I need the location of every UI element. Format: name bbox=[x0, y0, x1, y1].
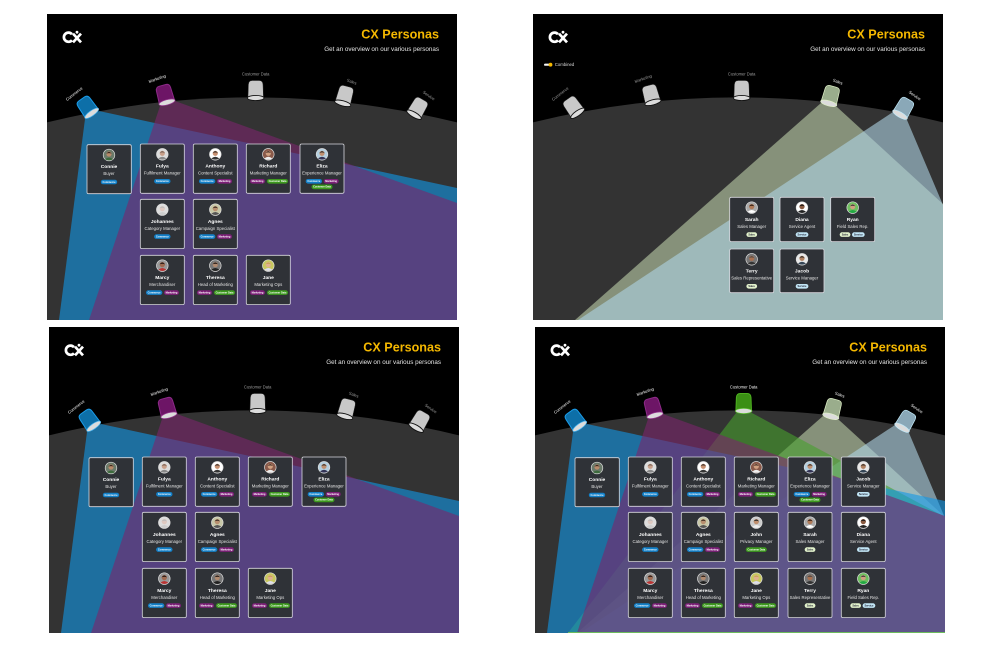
card: Jane bbox=[248, 568, 292, 618]
card: Theresa: Customer Data bbox=[704, 604, 722, 607]
card: Johannes: Johannes bbox=[151, 219, 174, 225]
label: Commerce: Commerce bbox=[551, 85, 570, 102]
spotlight: Sales bbox=[820, 84, 841, 108]
card: Johannes bbox=[140, 199, 184, 249]
logo bbox=[552, 344, 569, 355]
spotlight: Commerce bbox=[77, 407, 102, 433]
card: Agnes: Campaign Specialist bbox=[198, 539, 238, 544]
card: Agnes: Commerce bbox=[689, 548, 702, 551]
card: Richard: Customer Data bbox=[271, 493, 289, 496]
card: Johannes: Johannes bbox=[639, 532, 662, 538]
card: Agnes: Agnes bbox=[696, 532, 711, 538]
card: Johannes: Category Manager bbox=[147, 539, 183, 544]
card: Richard: Marketing Manager bbox=[252, 484, 289, 488]
card: Richard bbox=[246, 144, 290, 193]
card: Jane: Jane bbox=[263, 275, 274, 281]
card: Terry: Sales Representative bbox=[790, 595, 831, 600]
card: Anthony: Content Specialist bbox=[198, 170, 233, 176]
card: Marcy: Marketing bbox=[654, 604, 666, 607]
card: Agnes: Marketing bbox=[219, 235, 231, 238]
title: CX Personas bbox=[363, 341, 441, 355]
card: Sarah: Sales Manager bbox=[737, 224, 767, 229]
beam: Marketing bbox=[91, 414, 459, 633]
beam: Marketing bbox=[89, 101, 457, 320]
card: Richard bbox=[734, 457, 778, 506]
stage dome bbox=[535, 410, 945, 633]
card: Anthony: Content Specialist bbox=[200, 484, 235, 488]
card: Eliza: Experience Manager bbox=[790, 484, 830, 488]
card: Jane bbox=[246, 255, 290, 305]
card: Anthony bbox=[681, 457, 725, 506]
spotlight: Marketing bbox=[154, 83, 176, 107]
spotlight: Marketing bbox=[640, 83, 662, 107]
label: Commerce: Commerce bbox=[67, 398, 86, 415]
card: Jane: Customer Data bbox=[271, 604, 289, 607]
card: Anthony: Marketing bbox=[219, 180, 231, 183]
card: Theresa bbox=[681, 568, 725, 618]
card: Jane: Marketing Ops bbox=[254, 282, 282, 287]
toggle: Combined bbox=[544, 62, 575, 67]
panel: bottom-right, all spotlights bbox=[535, 327, 945, 633]
card: Jacob: Service bbox=[859, 493, 868, 496]
bottom edge line bbox=[568, 632, 945, 633]
card: Marcy: Commerce bbox=[636, 604, 649, 607]
card: Johannes bbox=[628, 512, 672, 562]
beam: Sales bbox=[575, 103, 943, 320]
spotlight: Customer Data bbox=[735, 394, 752, 414]
card: Fulya: Commerce bbox=[156, 180, 169, 183]
card: Sarah: Sales bbox=[748, 233, 756, 236]
card: Ryan bbox=[841, 568, 885, 618]
card: Anthony bbox=[195, 457, 239, 506]
card: Jane: Marketing Ops bbox=[256, 595, 284, 600]
label: Customer Data: Customer Data bbox=[242, 72, 270, 76]
card: Eliza: Eliza bbox=[316, 164, 328, 170]
card: Jane: Jane bbox=[751, 588, 762, 594]
card: Marcy: Commerce bbox=[148, 291, 161, 294]
beam: Customer Data bbox=[568, 413, 945, 633]
card: Ryan bbox=[831, 197, 875, 242]
beam: Service bbox=[578, 112, 943, 320]
beam: Sales bbox=[577, 416, 945, 633]
stage dome bbox=[49, 410, 459, 633]
card: Diana bbox=[841, 512, 885, 562]
card: Jane: Customer Data bbox=[269, 291, 287, 294]
card: Theresa bbox=[195, 568, 239, 618]
label: Service: Service bbox=[908, 90, 922, 102]
card: Connie: Connie bbox=[589, 477, 606, 483]
card: Anthony: Marketing bbox=[707, 493, 719, 496]
card: John bbox=[734, 512, 778, 562]
label: Customer Data: Customer Data bbox=[728, 72, 756, 76]
panel: top-left, Commerce and Marketing spotlights bbox=[47, 14, 457, 320]
card: Connie bbox=[87, 145, 131, 194]
label: Sales: Sales bbox=[832, 77, 844, 86]
card: Fulya: Fulfilment Manager bbox=[144, 170, 181, 176]
card: Ryan: Field Sales Rep. bbox=[837, 224, 868, 229]
card: Jacob: Service Manager bbox=[786, 276, 819, 280]
card: Marcy: Marcy bbox=[157, 588, 172, 594]
card: Agnes: Agnes bbox=[208, 219, 223, 225]
card: Agnes bbox=[193, 199, 237, 249]
logo bbox=[64, 31, 81, 42]
card: Agnes: Commerce bbox=[201, 235, 214, 238]
card: Terry: Terry bbox=[804, 588, 816, 594]
label: Service: Service bbox=[424, 403, 438, 415]
card: Jane: Marketing bbox=[740, 604, 752, 607]
card: Connie: Connie bbox=[103, 477, 120, 483]
card: Diana: Service bbox=[859, 548, 868, 551]
card: Anthony bbox=[193, 144, 237, 193]
card: Agnes: Commerce bbox=[203, 548, 216, 551]
card: Marcy: Merchandiser bbox=[151, 595, 178, 600]
card: Marcy: Commerce bbox=[150, 604, 163, 607]
card: Eliza: Eliza bbox=[804, 477, 816, 483]
card: Eliza: Experience Manager bbox=[302, 170, 342, 176]
card: Anthony: Anthony bbox=[693, 477, 713, 483]
spotlight: Sales bbox=[334, 84, 355, 108]
card: Theresa: Customer Data bbox=[218, 604, 236, 607]
card: Jane: Marketing bbox=[254, 604, 266, 607]
label: Customer Data: Customer Data bbox=[730, 384, 758, 390]
card: Marcy bbox=[140, 255, 184, 305]
title: CX Personas bbox=[361, 28, 439, 42]
card: Connie: Buyer bbox=[591, 484, 603, 489]
label: Service: Service bbox=[422, 90, 436, 102]
card: Theresa: Marketing bbox=[199, 291, 211, 294]
card: Fulya: Commerce bbox=[158, 493, 171, 496]
toggle: Combined: Combined bbox=[555, 62, 575, 67]
card: John: John bbox=[750, 532, 762, 538]
card: Johannes: Category Manager bbox=[633, 539, 669, 544]
card: Ryan: Ryan bbox=[847, 217, 859, 223]
card: Terry bbox=[788, 568, 832, 618]
label: Marketing: Marketing bbox=[148, 73, 167, 84]
logo bbox=[550, 31, 567, 42]
beam: Marketing bbox=[577, 414, 945, 633]
card: Sarah bbox=[730, 197, 774, 242]
card: Connie: Commerce bbox=[105, 494, 118, 497]
card: Diana: Diana bbox=[795, 217, 809, 223]
card: Agnes: Agnes bbox=[210, 532, 225, 538]
beam: Service bbox=[580, 425, 945, 633]
card: Eliza: Commerce bbox=[795, 493, 809, 496]
spotlight: Sales bbox=[336, 397, 357, 421]
card: Fulya: Fulfilment Manager bbox=[632, 484, 669, 488]
label: Commerce: Commerce bbox=[65, 85, 84, 102]
card: Connie: Commerce bbox=[591, 494, 604, 497]
subtitle: Get an overview on our various personas bbox=[326, 359, 441, 366]
card: Jacob: Jacob bbox=[795, 269, 809, 275]
card: Marcy: Marketing bbox=[166, 291, 178, 294]
card: Marcy: Marketing bbox=[168, 604, 180, 607]
card: Fulya: Fulfilment Manager bbox=[146, 484, 183, 488]
card: Eliza: Experience Manager bbox=[304, 484, 344, 488]
card: Connie bbox=[89, 458, 133, 507]
card: Marcy: Merchandiser bbox=[149, 282, 176, 287]
card: Sarah: Sarah bbox=[745, 217, 759, 223]
card: Richard: Marketing Manager bbox=[738, 484, 775, 488]
spotlight: Commerce bbox=[561, 94, 586, 120]
card: Fulya bbox=[142, 457, 186, 506]
card: Theresa: Marketing bbox=[687, 604, 699, 607]
card: Sarah: Sarah bbox=[803, 532, 817, 538]
card: Anthony: Anthony bbox=[205, 164, 225, 170]
card: Fulya bbox=[628, 457, 672, 506]
spotlight: Customer Data bbox=[733, 80, 750, 101]
card: Theresa: Theresa bbox=[206, 275, 225, 281]
card: Fulya: Commerce bbox=[644, 493, 657, 496]
card: Agnes bbox=[681, 512, 725, 562]
card: Eliza: Marketing bbox=[325, 180, 338, 183]
card: Fulya: Fulya bbox=[156, 164, 169, 170]
card: Connie: Buyer bbox=[103, 171, 115, 176]
spotlight: Customer Data bbox=[247, 80, 264, 101]
card: Richard: Marketing Manager bbox=[250, 170, 287, 176]
card: Connie bbox=[575, 458, 619, 507]
card: Richard: Richard bbox=[747, 477, 765, 483]
card: Eliza: Commerce bbox=[307, 180, 321, 183]
card: Jacob bbox=[780, 249, 824, 293]
title: CX Personas bbox=[849, 341, 927, 355]
card: Ryan: Ryan bbox=[857, 588, 869, 594]
card: Theresa bbox=[193, 255, 237, 305]
label: Marketing: Marketing bbox=[150, 386, 169, 397]
card: Jacob: Service bbox=[798, 285, 807, 288]
spotlight: Service bbox=[892, 95, 916, 121]
card: Ryan: Sales bbox=[842, 233, 849, 236]
card: Richard: Customer Data bbox=[269, 180, 287, 183]
beam: Commerce bbox=[59, 111, 457, 320]
card: Terry bbox=[730, 249, 774, 293]
card: Eliza: Customer Data bbox=[313, 186, 331, 189]
label: Sales: Sales bbox=[346, 77, 358, 86]
card: Eliza bbox=[300, 144, 344, 193]
card: Anthony: Marketing bbox=[221, 493, 233, 496]
card: Ryan: Service bbox=[864, 604, 874, 607]
card: Anthony: Content Specialist bbox=[686, 484, 721, 488]
card: Marcy: Marcy bbox=[643, 588, 658, 594]
card: Ryan: Field Sales Rep. bbox=[848, 595, 879, 600]
card: Connie: Connie bbox=[101, 164, 118, 170]
card: Terry: Sales bbox=[748, 285, 756, 288]
panel: bottom-left, Commerce and Marketing spotlights bbox=[49, 327, 459, 633]
card: Terry: Sales bbox=[807, 604, 814, 607]
card: Eliza: Customer Data bbox=[315, 499, 333, 502]
spotlight: Service bbox=[894, 408, 918, 434]
spotlight: Commerce bbox=[563, 407, 588, 433]
card: Sarah: Sales Manager bbox=[796, 539, 825, 544]
card: Fulya: Fulya bbox=[644, 477, 657, 483]
card: Anthony: Anthony bbox=[207, 477, 227, 483]
card: Richard: Marketing bbox=[254, 493, 266, 496]
spotlight: Marketing bbox=[642, 396, 664, 420]
card: Johannes: Category Manager bbox=[145, 226, 181, 231]
subtitle: Get an overview on our various personas bbox=[812, 359, 927, 366]
card: Jane: Customer Data bbox=[757, 604, 775, 607]
card: Johannes: Commerce bbox=[158, 548, 171, 551]
card: Richard: Customer Data bbox=[757, 493, 775, 496]
label: Commerce: Commerce bbox=[553, 398, 572, 415]
card: Theresa: Theresa bbox=[208, 588, 227, 594]
card: Richard: Richard bbox=[259, 164, 277, 170]
card: Connie: Buyer bbox=[105, 484, 117, 489]
card: Jane: Marketing Ops bbox=[742, 595, 770, 600]
card: Eliza bbox=[302, 457, 346, 506]
card: Agnes: Marketing bbox=[221, 548, 233, 551]
card: Marcy: Marcy bbox=[155, 275, 170, 281]
card: Diana bbox=[780, 197, 824, 242]
spotlight: Sales bbox=[822, 397, 843, 421]
card: Diana: Service Agent bbox=[789, 224, 816, 229]
spotlight: Service bbox=[406, 95, 430, 121]
stage dome bbox=[533, 97, 943, 320]
spotlight: Commerce bbox=[75, 94, 100, 120]
card: Diana: Service Agent bbox=[850, 539, 877, 544]
card: Anthony: Commerce bbox=[203, 493, 216, 496]
card: Richard: Marketing bbox=[740, 493, 752, 496]
card: Anthony: Commerce bbox=[689, 493, 702, 496]
card: Fulya bbox=[140, 144, 184, 193]
label: Sales: Sales bbox=[348, 390, 360, 399]
card: Marcy bbox=[142, 568, 186, 618]
card: Eliza: Customer Data bbox=[801, 499, 819, 502]
subtitle: Get an overview on our various personas bbox=[810, 46, 925, 53]
card: Theresa: Head of Marketing bbox=[198, 282, 233, 287]
beam: Commerce bbox=[547, 424, 945, 633]
card: Theresa: Head of Marketing bbox=[200, 595, 235, 600]
card: Eliza bbox=[788, 457, 832, 506]
card: Terry: Sales Representative bbox=[731, 276, 773, 280]
label: Marketing: Marketing bbox=[634, 73, 653, 84]
card: Anthony: Commerce bbox=[201, 180, 214, 183]
card: Eliza: Commerce bbox=[309, 493, 323, 496]
card: Marcy bbox=[628, 568, 672, 618]
card: Johannes: Commerce bbox=[156, 235, 169, 238]
spotlight: Marketing bbox=[156, 396, 178, 420]
subtitle: Get an overview on our various personas bbox=[324, 46, 439, 53]
card: Johannes: Johannes bbox=[153, 532, 176, 538]
card: Richard bbox=[248, 457, 292, 506]
card: Jane: Marketing bbox=[252, 291, 264, 294]
card: Jacob: Jacob bbox=[856, 477, 870, 483]
label: Sales: Sales bbox=[834, 390, 846, 399]
card: Diana: Diana bbox=[857, 532, 870, 538]
card: Jacob: Service Manager bbox=[847, 484, 880, 488]
card: Agnes: Marketing bbox=[707, 548, 719, 551]
card: Eliza: Marketing bbox=[813, 493, 826, 496]
spotlight: Customer Data bbox=[249, 394, 266, 414]
card: Jane bbox=[734, 568, 778, 618]
card: John: Privacy Manager bbox=[740, 539, 773, 544]
card: Johannes: Commerce bbox=[644, 548, 657, 551]
card: Agnes bbox=[195, 512, 239, 562]
spotlight: Service bbox=[408, 408, 432, 434]
card: Connie: Commerce bbox=[103, 181, 116, 184]
card: Sarah: Sales bbox=[807, 548, 814, 551]
card: Fulya: Fulya bbox=[158, 477, 171, 483]
card: Richard: Marketing bbox=[252, 180, 264, 183]
card: Theresa: Theresa bbox=[694, 588, 713, 594]
card: Sarah bbox=[788, 512, 832, 562]
stage dome bbox=[47, 97, 457, 320]
card: Ryan: Service bbox=[854, 233, 863, 236]
card: John: Customer Data bbox=[747, 548, 766, 551]
logo bbox=[66, 344, 83, 355]
card: Marcy: Merchandiser bbox=[637, 595, 664, 600]
label: Marketing: Marketing bbox=[636, 386, 655, 397]
card: Terry: Terry bbox=[746, 269, 758, 275]
beam: Commerce bbox=[61, 424, 459, 633]
card: Theresa: Customer Data bbox=[216, 291, 234, 294]
card: Johannes bbox=[142, 512, 186, 562]
card: Theresa: Marketing bbox=[201, 604, 213, 607]
card: Eliza: Marketing bbox=[327, 493, 340, 496]
card: Diana: Service bbox=[798, 233, 807, 236]
card: Jacob bbox=[841, 457, 885, 506]
card: Agnes: Campaign Specialist bbox=[684, 539, 724, 544]
title: CX Personas bbox=[847, 28, 925, 42]
card: Eliza: Eliza bbox=[318, 477, 330, 483]
panel: top-right, Sales and Service spotlights bbox=[533, 14, 943, 320]
label: Service: Service bbox=[910, 403, 924, 415]
card: Jane: Jane bbox=[265, 588, 276, 594]
card: Agnes: Campaign Specialist bbox=[196, 226, 236, 231]
card: Ryan: Sales bbox=[852, 604, 859, 607]
card: Richard: Richard bbox=[261, 477, 279, 483]
label: Customer Data: Customer Data bbox=[244, 384, 272, 390]
card: Theresa: Head of Marketing bbox=[686, 595, 721, 600]
